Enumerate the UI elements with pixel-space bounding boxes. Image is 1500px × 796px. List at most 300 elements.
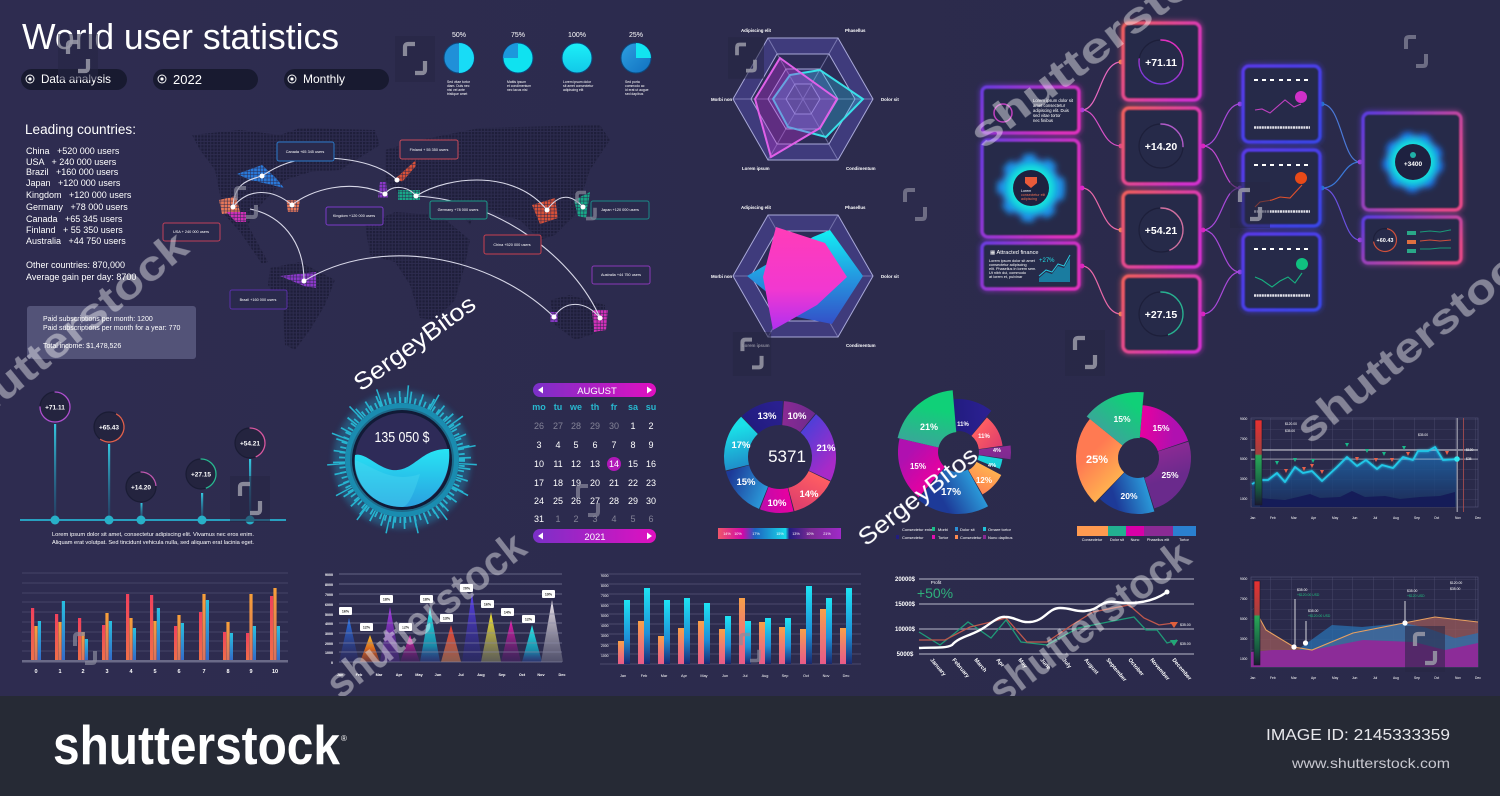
axis text <box>1240 577 1481 680</box>
day grid: 30 <box>609 421 619 431</box>
x labels: Jan <box>337 673 344 677</box>
pie 25%: sed dapibus <box>625 92 644 96</box>
flow panel: attracted finance: ▦ Attracted finance <box>990 250 1039 256</box>
trade markers <box>1284 451 1449 474</box>
segmented pie chart <box>1077 398 1198 542</box>
day grid: 2 <box>648 421 654 431</box>
donut legend: 14% <box>723 532 731 536</box>
y labels: 15000$ <box>895 602 916 608</box>
site url: www.shutterstock.com <box>1291 755 1450 771</box>
month labels: Apr <box>994 657 1006 669</box>
coral bars <box>618 598 846 664</box>
axis text: 1000 <box>1240 497 1248 501</box>
leading countries list <box>25 122 136 282</box>
axis text: $120.00 <box>1285 422 1297 426</box>
white series <box>919 592 1167 648</box>
y labels: 7000 <box>601 594 609 598</box>
axis text: $35.00 <box>1285 429 1295 433</box>
pie labels: 25% <box>1161 470 1179 480</box>
layered area chart <box>1240 577 1481 680</box>
donut labels: 15% <box>736 477 756 488</box>
flow panel: orange line card <box>1243 150 1320 226</box>
pie 50%: diam. Duis nec <box>447 84 470 88</box>
flow panel: magenta line card <box>1243 66 1320 142</box>
axis text: Feb <box>1270 516 1276 520</box>
connection arcs <box>233 158 600 318</box>
leading countries list: Brazil +160 000 users <box>26 167 119 177</box>
profit line chart <box>895 577 1194 684</box>
day grid: 30 <box>646 496 656 506</box>
day grid: 6 <box>648 514 654 524</box>
pie legend: Nunc dapibus <box>988 535 1012 540</box>
x labels: Jul <box>743 674 748 678</box>
flow panel: +3400: +3400 <box>1404 161 1423 168</box>
donut legend: 21% <box>823 532 831 536</box>
donut legend: 10% <box>806 532 814 536</box>
leading countries list: Germany +78 000 users <box>26 202 128 212</box>
country callouts: Japan +120 000 users <box>601 208 639 212</box>
timeline lollipop chart: +71.11 <box>45 404 65 412</box>
caption <box>52 532 254 546</box>
pie 50% <box>444 32 474 96</box>
day grid: 29 <box>590 421 600 431</box>
day grid: 19 <box>571 478 581 488</box>
x labels: May <box>700 674 708 678</box>
day grid: 31 <box>534 514 544 524</box>
flow panel: glowing badge: consectetur elit <box>1021 193 1045 197</box>
hexagon grid <box>733 38 873 160</box>
flow panel: attracted finance: at lorem et, pulvinar <box>989 275 1023 279</box>
x labels: 6 <box>177 669 181 675</box>
donut labels: 10% <box>767 498 787 509</box>
pie labels: 15% <box>1113 414 1131 424</box>
donut labels: 10% <box>787 411 807 422</box>
footer bar <box>0 696 1500 796</box>
image id: IMAGE ID: 2145333359 <box>1266 727 1450 744</box>
registered mark: ® <box>341 734 347 743</box>
pill: year: 2022 <box>173 72 202 87</box>
flow panel: +14.20: +14.20 <box>1145 141 1177 153</box>
flow panel: glowing badge <box>982 140 1079 237</box>
axis labels: Lorem ipsum <box>742 166 770 171</box>
timeline lollipop chart <box>20 392 286 546</box>
country callouts: USA + 240 000 users <box>173 230 209 234</box>
purple area <box>1251 640 1478 667</box>
axis text: Apr <box>1311 516 1317 520</box>
x labels: Aug <box>762 674 768 678</box>
day grid: 24 <box>534 496 544 506</box>
x labels: 2 <box>81 669 85 675</box>
day grid: 14 <box>609 459 619 469</box>
axis text: Jun <box>1352 676 1357 680</box>
pin labels: +$120 USD <box>1407 594 1425 598</box>
axis labels: Adipiscing elit <box>741 28 772 33</box>
pie legend: Phasellus elit <box>1147 538 1170 542</box>
month labels: January <box>928 657 947 678</box>
x labels: Jun <box>722 674 728 678</box>
cyan bars <box>624 586 852 664</box>
donut legend: 17% <box>752 532 760 536</box>
triangle peak chart: 12% <box>525 618 533 622</box>
gridlines <box>600 574 861 664</box>
day grid: 27 <box>590 496 600 506</box>
day grid: 20 <box>590 478 600 488</box>
pie 25%: commodo ac <box>625 84 645 88</box>
pie labels: 17% <box>941 487 961 498</box>
radar chart: filled <box>711 205 899 348</box>
circular gauge 135 050 $: 135 050 $ <box>374 429 430 446</box>
month labels: July <box>1060 657 1073 670</box>
y labels: 2000 <box>601 644 609 648</box>
month labels: March <box>972 657 988 674</box>
pie labels <box>1086 414 1179 501</box>
axis text: Aug <box>1393 516 1399 520</box>
pin labels: +$120.00 USD <box>1297 593 1320 597</box>
pie 100%: Lorem ipsum dolor <box>563 80 592 84</box>
x labels: Apr <box>396 673 403 677</box>
ring <box>345 403 459 517</box>
author credit top: SergeyBitos <box>349 290 481 397</box>
y labels: 3000 <box>601 634 609 638</box>
axis text: 3000 <box>1240 637 1248 641</box>
stems <box>54 424 251 520</box>
caption: Lorem ipsum dolor sit amet, consectetur adipiscing elit. Vivamus nec eros enim. <box>52 532 254 538</box>
pill: period <box>284 69 389 90</box>
grouped bar chart <box>22 573 288 675</box>
x labels: Apr <box>681 674 688 678</box>
gridlines <box>22 573 288 651</box>
country callouts: Finland + 55 350 users <box>410 148 448 152</box>
month labels: February <box>950 657 971 680</box>
flow panel: +60.43: +60.43 <box>1377 238 1393 244</box>
day grid: 18 <box>553 478 563 488</box>
day grid: 5 <box>630 514 636 524</box>
axis nodes <box>50 516 254 524</box>
axis text: Apr <box>1311 676 1317 680</box>
stock chart <box>1240 417 1481 520</box>
pin labels: +$120.00 USD <box>1308 614 1331 618</box>
weekdays <box>532 402 656 412</box>
pie 50%: nisi vel ante <box>447 88 465 92</box>
axis labels: Dolor sit <box>881 274 899 279</box>
end badges: $35.00 <box>1180 623 1191 627</box>
axis text: 9000 <box>1240 417 1248 421</box>
pie 100%: 100% <box>568 32 586 39</box>
pie legend: Consectetur <box>902 535 924 540</box>
donut legend: 13% <box>792 532 800 536</box>
spikes <box>332 390 472 530</box>
watermark text: shutterstock <box>979 531 1200 713</box>
pie legend: Tortor <box>938 535 949 540</box>
axis text: 5000 <box>1240 457 1248 461</box>
donut legend: 15% <box>776 532 784 536</box>
axis text: Jul <box>1373 676 1377 680</box>
flow panel: attracted finance: elit. Phasellus in lorem sem. <box>989 267 1036 271</box>
axis text: $35 <box>1466 457 1472 461</box>
country callouts: Australia +44 750 users <box>601 273 641 277</box>
profit label: Profit <box>931 580 942 585</box>
x labels: Sep <box>499 673 506 677</box>
triangle peak chart <box>325 573 565 677</box>
flow connector nodes <box>1080 60 1362 316</box>
day grid: 11 <box>553 459 563 469</box>
leading countries list: Japan +120 000 users <box>26 178 121 188</box>
x labels: Nov <box>537 673 545 677</box>
country callouts: Brazil +160 000 users <box>240 298 277 302</box>
flow panel: intro text: amet consectetur <box>1033 103 1066 108</box>
country callouts <box>163 140 650 309</box>
triangle peak chart: 13% <box>443 616 451 620</box>
axis text: Oct <box>1434 516 1439 520</box>
leading countries list: Leading countries: <box>25 122 136 137</box>
pin labels: $35.00 <box>1297 588 1307 592</box>
leading countries list: Finland + 55 350 users <box>26 225 123 235</box>
axis text: May <box>1332 516 1339 520</box>
x labels: 8 <box>226 669 230 675</box>
day grid: 5 <box>573 440 579 450</box>
title: World user statistics <box>22 16 339 57</box>
year footer <box>533 529 656 543</box>
pie 75%: et condimentum <box>507 84 531 88</box>
y labels: 9000 <box>601 574 609 578</box>
axis labels: Condimentum <box>846 343 876 348</box>
x labels: Jan <box>620 674 626 678</box>
flow panel: attracted finance: Lorem ipsum dolor sit amet <box>989 259 1036 263</box>
edge line <box>1254 608 1478 650</box>
flow panel: intro text: Lorem ipsum dolor sit <box>1033 98 1074 103</box>
flow panel: attracted finance <box>982 243 1079 289</box>
y labels: 1000 <box>601 654 609 658</box>
x labels: 5 <box>153 669 157 675</box>
y labels: 7000 <box>325 593 333 597</box>
axis labels <box>711 205 899 348</box>
weekdays: th <box>591 402 599 412</box>
baseline <box>22 660 288 662</box>
watermark frames <box>58 34 1445 672</box>
axis text: Nov <box>1455 676 1461 680</box>
pin labels: $120.00 <box>1450 581 1462 585</box>
day grid <box>534 421 656 524</box>
outer haze <box>340 398 464 522</box>
pie 100% <box>562 32 594 92</box>
axis text: 7000 <box>1240 437 1248 441</box>
footer logo: shutterstock <box>53 714 340 776</box>
data pins <box>1295 599 1405 647</box>
day grid: 6 <box>592 440 598 450</box>
x labels: 10 <box>272 669 278 675</box>
triangle peak chart: 20% <box>463 586 471 590</box>
day grid: 25 <box>553 496 563 506</box>
x labels: Oct <box>803 674 810 678</box>
caption: Aliquam erat volutpat. Sed tincidunt vehicula nulla, sed aliquam erat lacinia eget. <box>52 540 254 546</box>
y labels: 2000 <box>325 642 333 646</box>
day grid: 4 <box>611 514 617 524</box>
y labels: 8000 <box>601 584 609 588</box>
month labels: November <box>1148 657 1171 683</box>
leading countries list: Kingdom +120 000 users <box>26 190 132 200</box>
y labels: 5000 <box>601 614 609 618</box>
x labels: 4 <box>129 669 133 675</box>
month labels: June <box>1038 657 1051 671</box>
month labels: October <box>1126 657 1145 678</box>
x labels: Feb <box>356 673 363 677</box>
day grid: 3 <box>592 514 598 524</box>
flow panel: +3400 <box>1363 113 1461 210</box>
axis text: Jun <box>1352 516 1357 520</box>
day grid: 26 <box>571 496 581 506</box>
watermark text: shutterstock <box>317 522 535 707</box>
triangle peak chart: 14% <box>504 610 512 614</box>
triangle peak chart: 16% <box>484 602 492 606</box>
series: pink outline <box>755 58 837 157</box>
axis text: Oct <box>1434 676 1439 680</box>
x labels: Nov <box>823 674 829 678</box>
pie labels: 4% <box>993 448 1001 454</box>
pie 50%: 50% <box>452 32 466 39</box>
subscriptions panel: Paid subscriptions per month: 1200 <box>43 316 153 323</box>
day grid: 29 <box>628 496 638 506</box>
x labels <box>337 673 565 677</box>
country callouts: China +520 000 users <box>493 243 531 247</box>
pie legend: Consectetur <box>1082 538 1103 542</box>
day grid: 26 <box>534 421 544 431</box>
pie 75%: 75% <box>511 32 525 39</box>
profit label: +50% <box>917 585 953 601</box>
axis text: 3000 <box>1240 477 1248 481</box>
flow panel: +27.15: +27.15 <box>1145 309 1177 321</box>
axis text: Jan <box>1250 676 1255 680</box>
glow blob <box>1000 157 1062 219</box>
day grid: 7 <box>611 440 617 450</box>
pie labels: 4% <box>988 463 996 469</box>
liquid <box>355 449 449 507</box>
pie legend: Ornare tortor <box>988 527 1012 532</box>
day grid: 21 <box>609 478 619 488</box>
selected day <box>607 457 621 471</box>
flow panel: +54.21: +54.21 <box>1145 225 1177 237</box>
y labels <box>325 573 333 665</box>
orange area <box>1254 608 1478 667</box>
pie 25% <box>621 32 651 96</box>
y labels: 3000 <box>325 632 333 636</box>
timeline lollipop chart: +65.43 <box>99 424 119 432</box>
x labels: 3 <box>105 669 109 675</box>
flow panel: green line card <box>1243 234 1320 310</box>
axis text: Jul <box>1373 516 1377 520</box>
y labels <box>895 577 916 658</box>
donut labels: 21% <box>816 443 836 454</box>
donut legend: 10% <box>734 532 742 536</box>
flow panel: +71.11 <box>1123 23 1200 100</box>
paired gradient bar chart <box>600 574 861 678</box>
flow panel: attracted finance: +27% <box>1039 258 1055 264</box>
x labels: Aug <box>477 673 485 677</box>
axis text: May <box>1332 676 1339 680</box>
level gauge <box>1254 581 1260 665</box>
pie labels: 15% <box>910 462 926 471</box>
hexagon grid <box>733 215 873 337</box>
day grid: 28 <box>609 496 619 506</box>
pie 75%: Mattis ipsum <box>507 80 526 84</box>
gridlines <box>919 579 1194 654</box>
percentage pie row <box>444 32 651 96</box>
axis text: $35.00 <box>1418 433 1428 437</box>
price line <box>1252 447 1457 484</box>
shield icon <box>1025 177 1037 188</box>
axis text: Mar <box>1291 516 1298 520</box>
month labels <box>928 657 1193 684</box>
leading countries list: China +520 000 users <box>26 146 120 156</box>
x labels <box>620 674 849 678</box>
value tags <box>339 584 555 631</box>
circular gauge 135 050 $ <box>332 390 472 530</box>
y labels <box>601 574 609 658</box>
flow panel: attracted finance: consectetur adipiscing <box>989 263 1027 267</box>
year footer: 2021 <box>584 532 606 543</box>
level bands <box>1251 449 1478 460</box>
axis text: Sep <box>1414 516 1420 520</box>
x labels: Dec <box>843 674 849 678</box>
flow panel: +27.15 <box>1123 276 1200 352</box>
pie legend <box>902 527 1012 540</box>
triangle peak chart: 18% <box>423 598 431 602</box>
month labels: September <box>1104 657 1128 684</box>
pill: year <box>153 69 258 90</box>
leading countries list: Canada +65 345 users <box>26 214 123 224</box>
triangle peak chart: 19% <box>545 592 553 596</box>
y labels: 0 <box>331 661 333 665</box>
month labels: May <box>1016 657 1029 670</box>
triangle peak chart: 12% <box>363 626 371 630</box>
axis text: 7000 <box>1240 597 1248 601</box>
y labels: 4000 <box>325 622 333 626</box>
subscriptions panel: Paid subscriptions per month for a year: 770 <box>43 325 180 332</box>
x labels: 1 <box>58 669 62 675</box>
x labels: Oct <box>519 673 526 677</box>
pie labels: 15% <box>1152 423 1170 433</box>
pie 75%: nec lacus nisi <box>507 88 528 92</box>
x labels: Mar <box>376 673 383 677</box>
flow panel: intro text: sed vitae tortor <box>1033 113 1061 118</box>
donut labels: 17% <box>731 440 751 451</box>
end badges: $35.00 <box>1180 642 1191 646</box>
pie legend: Consectetur <box>960 535 982 540</box>
pin labels: $35.00 <box>1450 587 1460 591</box>
pie 25%: Sed porta <box>625 80 640 84</box>
flow panel: intro text: adipiscing elit. Duis <box>1033 108 1069 113</box>
calendar <box>532 383 656 543</box>
day grid: 1 <box>555 514 561 524</box>
x labels: Jun <box>435 673 442 677</box>
triangle peak chart: 16% <box>342 610 350 614</box>
pie 75% <box>503 32 533 92</box>
triangle peak chart: 18% <box>383 598 391 602</box>
x labels: May <box>415 673 424 677</box>
pie 50%: Sed vitae tortor <box>447 80 471 84</box>
x labels <box>34 669 278 675</box>
filter pills <box>21 69 389 90</box>
axis labels: Lorem ipsum <box>742 343 770 348</box>
axis text: Dec <box>1475 516 1481 520</box>
country callouts: Canada +65 345 users <box>286 150 324 154</box>
axis text: Dec <box>1475 676 1481 680</box>
x labels: Jul <box>458 673 464 677</box>
donut legend <box>718 528 841 539</box>
month labels: August <box>1082 657 1099 676</box>
blue area <box>1300 623 1478 667</box>
axis text: 5000 <box>1240 617 1248 621</box>
weekdays: sa <box>628 402 639 412</box>
